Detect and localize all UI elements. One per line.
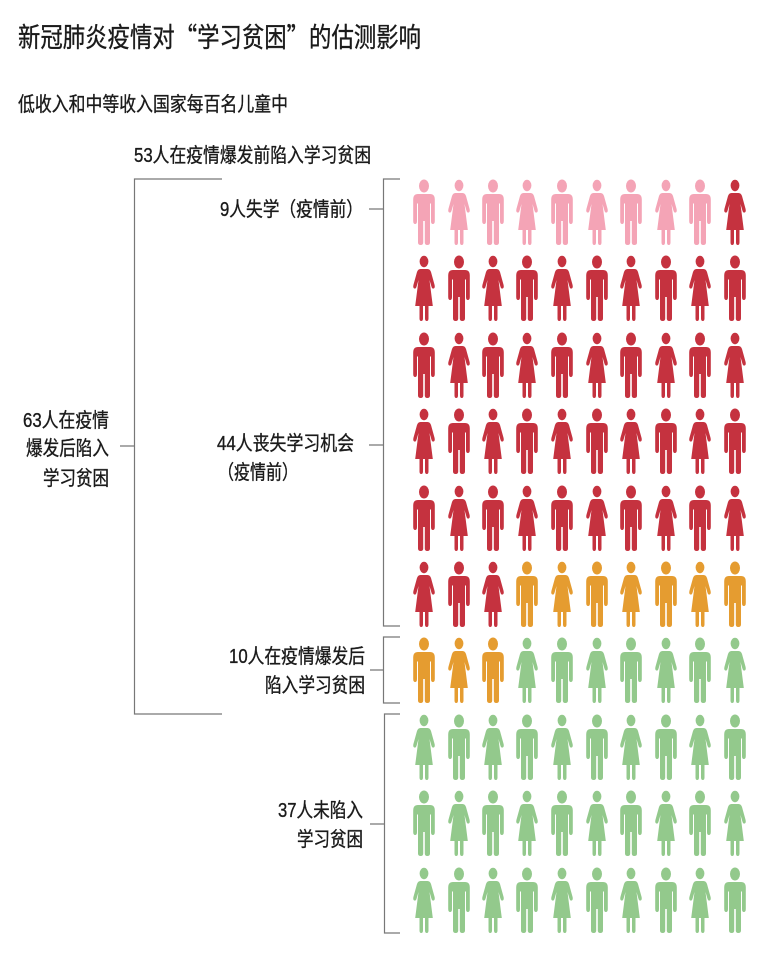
label: 10 after pandemic: [229, 645, 365, 697]
label: 37 not in learning poverty: [278, 799, 363, 851]
figures row 1: 9 pink, 1 red: [413, 180, 746, 245]
figures row 7: 3 orange, 7 green: [413, 638, 746, 703]
label: 63 after pandemic: 学习贫困: [43, 467, 109, 490]
title: 新冠肺炎疫情对“学习贫困”的估测影响: [18, 16, 421, 55]
figures row 10: green: [413, 868, 746, 933]
label: 44 lost learning: （疫情前）: [218, 461, 298, 484]
label: 10 after pandemic: 陷入学习贫困: [265, 674, 365, 697]
label: 44 lost learning: 44人丧失学习机会: [217, 432, 354, 455]
bracket: 10 after pandemic: [370, 637, 400, 703]
figures row 4: red: [413, 408, 746, 474]
bracket: 63 total: [120, 179, 222, 714]
label: 63 after pandemic: 63人在疫情: [23, 409, 109, 432]
label: 44 lost learning: [217, 432, 354, 484]
figures row 8: green: [413, 714, 746, 780]
label: 37 not in learning poverty: 37人未陷入: [278, 799, 363, 822]
figures row 3: red: [413, 332, 746, 398]
figures row 6: 3 red, 7 orange: [413, 562, 746, 627]
label: 37 not in learning poverty: 学习贫困: [297, 828, 363, 851]
subtitle: 低收入和中等收入国家每百名儿童中: [18, 93, 288, 116]
figures row 2: red: [413, 256, 746, 321]
bracket: 37 not affected: [370, 714, 400, 933]
label: 63 after pandemic: [23, 409, 109, 490]
heading: 53 before pandemic: 53人在疫情爆发前陷入学习贫困: [134, 144, 371, 167]
figures row 9: green: [413, 790, 746, 856]
label: 63 after pandemic: 爆发后陷入: [26, 437, 109, 460]
figures row 5: red: [413, 486, 746, 551]
label: 10 after pandemic: 10人在疫情爆发后: [229, 645, 365, 668]
bracket: 9 out of school and 44 lost learning: [369, 179, 400, 626]
label: 9 out of school: 9人失学（疫情前）: [220, 198, 363, 221]
